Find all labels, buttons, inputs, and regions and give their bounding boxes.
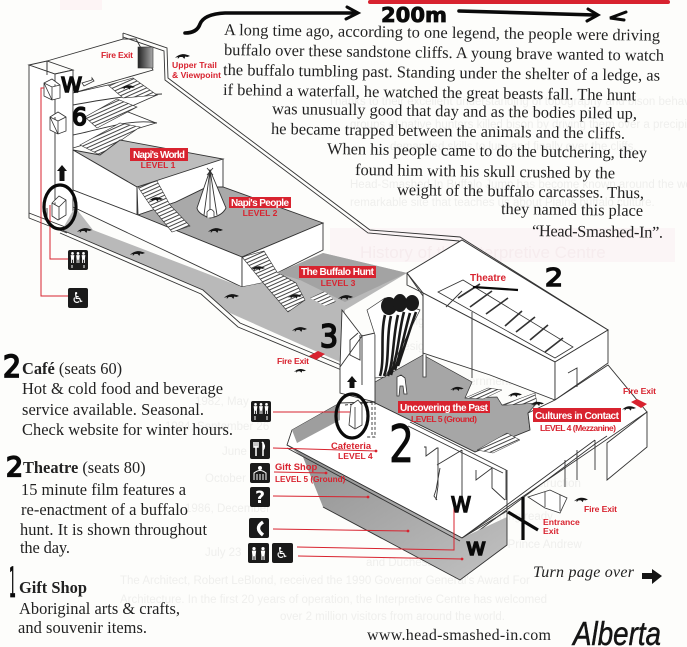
- legend story text: they named this place: [501, 199, 643, 220]
- label: fire exit right: Fire Exit: [623, 386, 656, 396]
- interior walls: [408, 422, 506, 500]
- handwritten distance: 200m: [381, 3, 447, 27]
- theatre text block: Theatre (seats 80): [23, 458, 146, 477]
- label: Cultures in Contact: Cultures in Contact: [535, 411, 620, 422]
- turn page over: Turn page over: [533, 564, 635, 581]
- legend story text: found him with his skull crushed by the: [355, 160, 615, 182]
- label: theatre: Theatre: [470, 273, 507, 284]
- label: Napi's World: Napi's World: [133, 150, 185, 161]
- background show-through text: and Duchess of York: [366, 557, 472, 569]
- tipi: [197, 168, 226, 218]
- icon: wheelchair lower: ♿: [275, 544, 289, 562]
- label: upper trail: & Viewpoint: [172, 70, 221, 80]
- icon: information: ?: [255, 488, 265, 508]
- label: upper trail: [172, 60, 221, 80]
- label: Napi's World: LEVEL 1: [141, 160, 176, 170]
- handwritten W tower: W: [61, 73, 82, 97]
- theatre text block: [20, 458, 207, 557]
- plate edge lines: [287, 445, 507, 580]
- icon: lifts lower: [251, 401, 271, 422]
- entrance structure: [528, 490, 567, 513]
- icon: wheelchair upper: ♿: [71, 289, 85, 307]
- mezzanine and ground plate: [287, 365, 647, 541]
- background show-through text: Building ready: [480, 511, 553, 523]
- top red bar: [368, 0, 670, 4]
- theatre text block: re-enactment of a buffalo: [21, 500, 188, 519]
- label: Napi's People: Napi's People: [231, 198, 289, 209]
- gift shop text block: Gift Shop: [19, 578, 87, 597]
- handwritten 2 theatre text: 2: [6, 452, 23, 483]
- label: Uncovering the Past: [398, 401, 490, 424]
- background show-through text: remarkable site that teaches us about Plains buffalo culture.: [350, 197, 655, 209]
- icon: lifts: [68, 250, 88, 270]
- background show-through text: over 2 million visitors from around the world.: [280, 611, 505, 623]
- handwritten big 2: 2: [389, 415, 414, 475]
- label: Napi's People: LEVEL 2: [243, 208, 278, 218]
- amenity icons: [68, 250, 293, 563]
- label: gift shop: LEVEL 5 (Ground): [275, 475, 346, 484]
- label: upper trail: Upper Trail: [172, 60, 217, 70]
- handwritten 2 cafe: 2: [3, 350, 21, 385]
- background show-through text: June: [222, 446, 247, 458]
- theatre text block: hunt. It is shown throughout: [20, 520, 207, 539]
- handwritten 3: 3: [320, 319, 338, 355]
- red fire exit markers: [309, 351, 647, 408]
- background show-through text: Designated a National Historic Site: [395, 316, 573, 328]
- label: entrance and exit: Exit: [543, 526, 559, 536]
- label: The Buffalo Hunt: [299, 266, 376, 288]
- label: fire exit lower: Fire Exit: [584, 504, 617, 514]
- grey shadow under plate: [287, 445, 507, 580]
- legend story text: buffalo over these sandstone cliffs. A young brave wanted to watch: [224, 40, 664, 65]
- red map labels: [101, 50, 656, 536]
- background show-through text: The Architect, Robert LeBlond, received the 1990 Governor General's Award For: [120, 575, 530, 587]
- label: fire exit top: Fire Exit: [101, 50, 133, 60]
- cafe text block: Check website for winter hours.: [22, 420, 233, 439]
- icon: wheelchair lower: [272, 543, 293, 563]
- legend story text: weight of the buffalo carcasses. Thus,: [397, 180, 644, 202]
- legend story text: [223, 20, 664, 242]
- handwritten w lower: w: [466, 533, 486, 561]
- top distance arrow: [185, 7, 626, 33]
- background show-through text: October: [205, 473, 246, 485]
- label: entrance and exit: [543, 517, 580, 536]
- legend story text: was unusually good that day and as the bodies piled up,: [272, 99, 637, 123]
- handwritten 2 theatre: 2: [545, 263, 563, 292]
- background show-through text: 1982, May: [195, 396, 249, 408]
- background show-through text: demanded skills to lure and finally over the cliffs.: [390, 141, 637, 153]
- cafeteria circle: [336, 394, 368, 438]
- label: Uncovering the Past: Uncovering the Past: [400, 403, 489, 414]
- turn page over: [533, 564, 662, 584]
- background show-through text: History of the Interpretive Centre: [360, 243, 606, 262]
- cafe text block: [22, 359, 233, 439]
- label: gift shop: Gift Shop: [275, 461, 317, 472]
- icon: food: [250, 439, 270, 459]
- handwritten X: [508, 497, 538, 540]
- label: Cultures in Contact: LEVEL 4 (Mezzanine): [540, 423, 616, 433]
- stairs to ground level: [465, 388, 537, 453]
- background show-through text: Start construction: [495, 443, 584, 455]
- tower: [29, 61, 73, 233]
- background show-through text: Provincial Government approval: [395, 376, 559, 388]
- theatre underline: [473, 287, 518, 290]
- upper corridor and outer double wall: [29, 33, 608, 331]
- theatre text block: 15 minute film features a: [21, 480, 187, 499]
- lower walkway: [60, 207, 407, 376]
- background show-through text: Finish construction: [485, 478, 581, 490]
- background show-through text: July 23: [205, 547, 241, 559]
- handwritten 6: 6: [72, 103, 87, 131]
- label: cafeteria: [331, 440, 373, 461]
- ground floor grey: [373, 355, 537, 452]
- legend story text: A long time ago, according to one legend, the people were driving: [224, 20, 660, 45]
- icon: telephone: [249, 518, 269, 538]
- label: Napi's People: [229, 197, 291, 218]
- label: The Buffalo Hunt: LEVEL 3: [321, 278, 356, 288]
- cafe text block: Café (seats 60): [22, 359, 122, 378]
- label: cafeteria: Cafeteria: [331, 440, 372, 451]
- tower circle: [44, 185, 76, 229]
- cliff sculpture: [367, 294, 420, 378]
- handwritten W plate: W: [451, 493, 471, 517]
- handwritten annotations: 1: [9, 558, 16, 607]
- label: Napi's World: [130, 148, 188, 170]
- lifts in tower: [44, 79, 67, 220]
- buffalo silhouettes: [77, 54, 636, 502]
- red leader lines: [41, 88, 463, 560]
- label: fire exit left: Fire Exit: [277, 356, 309, 366]
- legend story text: if behind a waterfall, he watched the great beasts fall. The hunt: [223, 80, 637, 104]
- background show-through text: 1984, September 26: [165, 421, 269, 433]
- label: gift shop: [275, 461, 346, 484]
- cafe text block: service available. Seasonal.: [22, 400, 204, 419]
- floor plan diagram: [29, 33, 647, 580]
- cafe text block: Hot & cold food and beverage: [22, 379, 223, 398]
- cafeteria lift: [349, 400, 362, 429]
- icon: restrooms: [248, 543, 269, 563]
- level 2 platform: [73, 181, 323, 287]
- label: cafeteria: LEVEL 4: [338, 451, 373, 461]
- exit arrow outline: [82, 78, 94, 86]
- label: Cultures in Contact: [533, 408, 621, 433]
- label: Uncovering the Past: LEVEL 5 (Ground): [411, 414, 477, 424]
- icon: gift shop: [250, 463, 270, 483]
- gift shop text block: [18, 578, 180, 637]
- fire exit door: [138, 47, 153, 68]
- gift shop text block: and souvenir items.: [18, 618, 147, 637]
- background show-through text: Official opening by Prince Andrew: [410, 539, 582, 551]
- legend story text: he became trapped between the animals and the cliffs.: [271, 119, 625, 143]
- legend story text: “Head-Smashed-In”.: [532, 221, 663, 242]
- label: entrance and exit: Entrance: [543, 517, 580, 527]
- icon: information: [250, 487, 270, 508]
- level 1 platform: [73, 140, 223, 215]
- buffalo figure: [397, 375, 407, 396]
- upper ramps and stairs: [73, 78, 162, 155]
- label: The Buffalo Hunt: The Buffalo Hunt: [301, 267, 375, 278]
- website: www.head-smashed-in.com: [367, 627, 552, 644]
- background show-through text: 1986, December: [185, 503, 270, 515]
- icon: wheelchair upper: [68, 288, 88, 308]
- theatre text block: the day.: [20, 538, 70, 557]
- gift shop text block: Aboriginal arts & crafts,: [19, 599, 180, 618]
- legend story text: When his people came to do the butchering, they: [327, 139, 648, 162]
- pillar block: [340, 310, 375, 437]
- background show-through text: Designated a World Heritage Site: [395, 341, 565, 353]
- background show-through text: Architecture. In the first 20 years of operation, the Interpretive Centre has welcomed: [120, 594, 547, 606]
- legend story text: the buffalo tumbling past. Standing under the shelter of a ledge, as: [223, 60, 660, 85]
- theatre block: [407, 240, 608, 400]
